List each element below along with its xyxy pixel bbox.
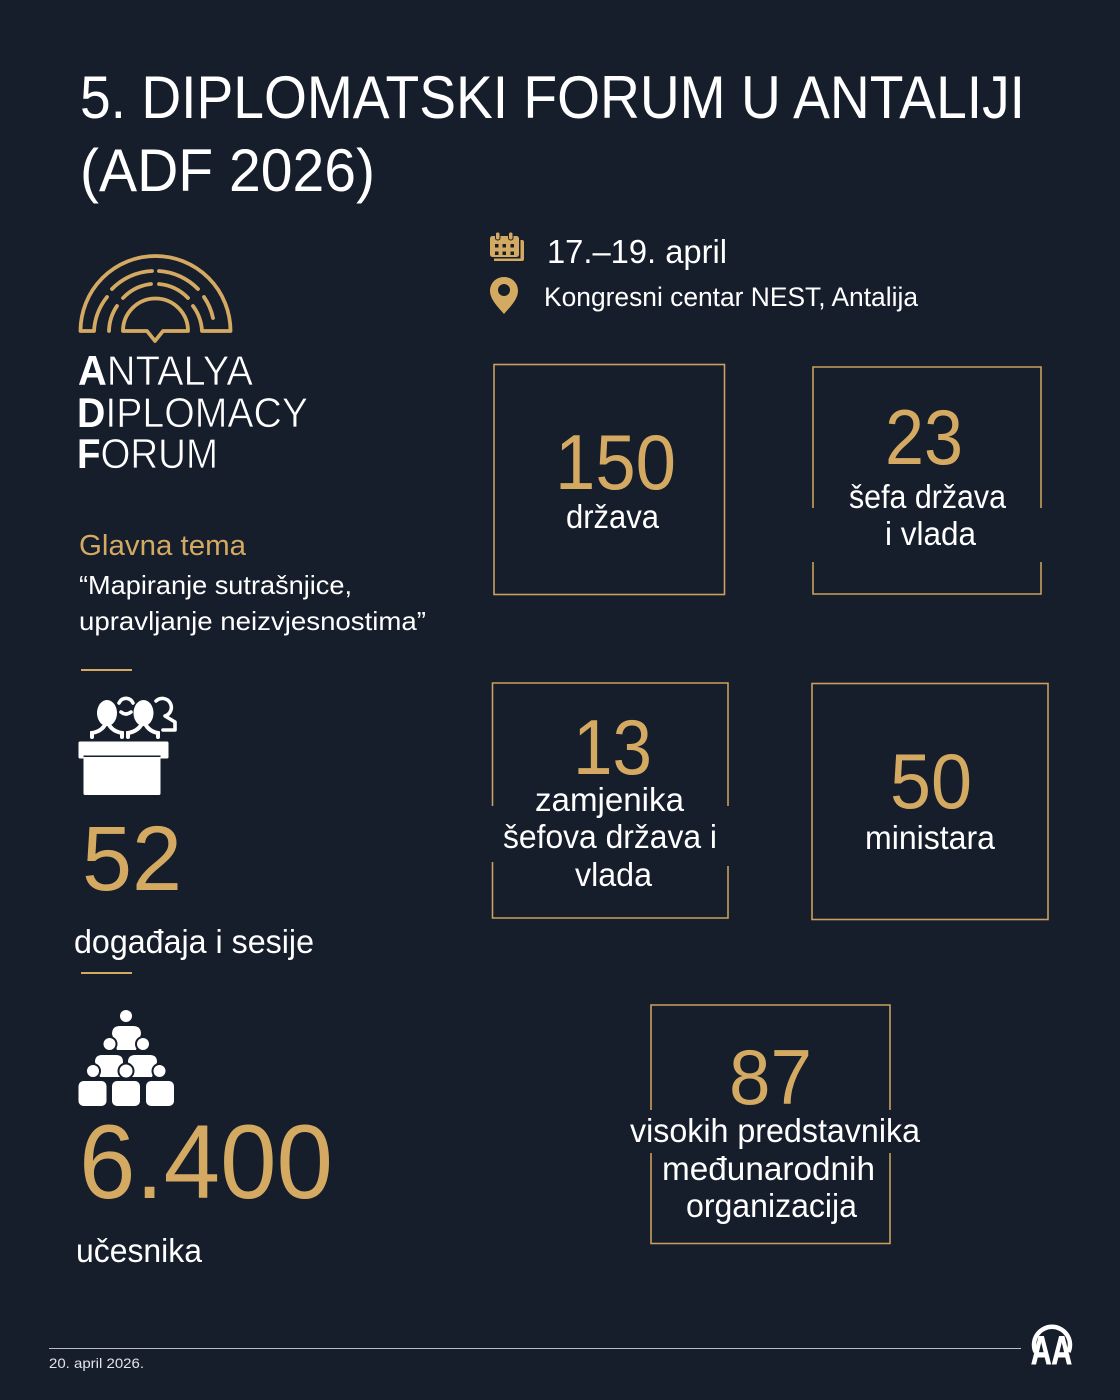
main theme text [79, 570, 426, 636]
panel: 13 deputy heads: vlada [575, 856, 653, 893]
panel: 23 heads of state: i vlada [885, 515, 977, 552]
panel: 13 deputy heads: šefova država i [503, 818, 717, 855]
logo wordmark: FORUM [77, 430, 218, 477]
location: Kongresni centar NEST, Antalija [544, 282, 919, 312]
panel: 50 ministers [812, 684, 1048, 920]
icon: podium with speakers [78, 698, 175, 795]
panel: 150 countries [494, 364, 724, 594]
panel: 50 ministers: ministara [865, 819, 996, 856]
panel: 23 heads of state [813, 367, 1041, 594]
panel: 87 international organizations: organizacija [686, 1187, 858, 1224]
panel: 13 deputy heads [492, 683, 728, 918]
panel: 13 deputy heads: zamjenika [535, 781, 685, 818]
title: (ADF 2026) [80, 137, 375, 204]
panel: 50 ministers: 50 [890, 737, 972, 825]
panel: 87 international organizations [630, 1005, 921, 1244]
panel: 13 deputy heads: 13 [573, 703, 652, 791]
main theme heading: Glavna tema [79, 530, 247, 562]
title: 5. DIPLOMATSKI FORUM U ANTALIJI [80, 64, 1025, 131]
panel: 87 international organizations: 87 [729, 1033, 812, 1121]
stat: participants [76, 1104, 333, 1269]
icon: group of participants [78, 1010, 174, 1106]
icon: AA agency logo [1031, 1327, 1072, 1373]
panel: 150 countries: 150 [555, 418, 676, 506]
panel: 23 heads of state: šefa država [849, 478, 1007, 515]
stat: participants: 6.400 [79, 1104, 333, 1221]
panel: 87 international organizations: međunarodnih [662, 1150, 875, 1187]
logo wordmark [77, 347, 308, 477]
main theme text: “Mapiranje sutrašnjice, [79, 570, 352, 600]
stat: participants: učesnika [76, 1232, 203, 1269]
icon: calendar [490, 232, 524, 261]
panel: 23 heads of state: 23 [885, 393, 963, 481]
logo wordmark: ANTALYA [78, 347, 253, 394]
icon: Antalya Diplomacy Forum logo emblem [80, 256, 230, 341]
stat: events [74, 808, 314, 960]
main theme text: upravljanje neizvjesnostima” [79, 606, 426, 636]
logo wordmark: DIPLOMACY [77, 389, 308, 436]
footer date: 20. april 2026. [49, 1355, 144, 1371]
title [80, 64, 1025, 204]
date: 17.–19. april [547, 233, 727, 270]
icon: location pin [490, 277, 518, 314]
stat: events: događaja i sesije [74, 923, 314, 960]
icon: AA agency logo: AA [1031, 1329, 1072, 1373]
panel: 150 countries: država [566, 498, 660, 535]
stat: events: 52 [82, 808, 182, 910]
panel: 87 international organizations: visokih predstavnika [630, 1112, 921, 1149]
